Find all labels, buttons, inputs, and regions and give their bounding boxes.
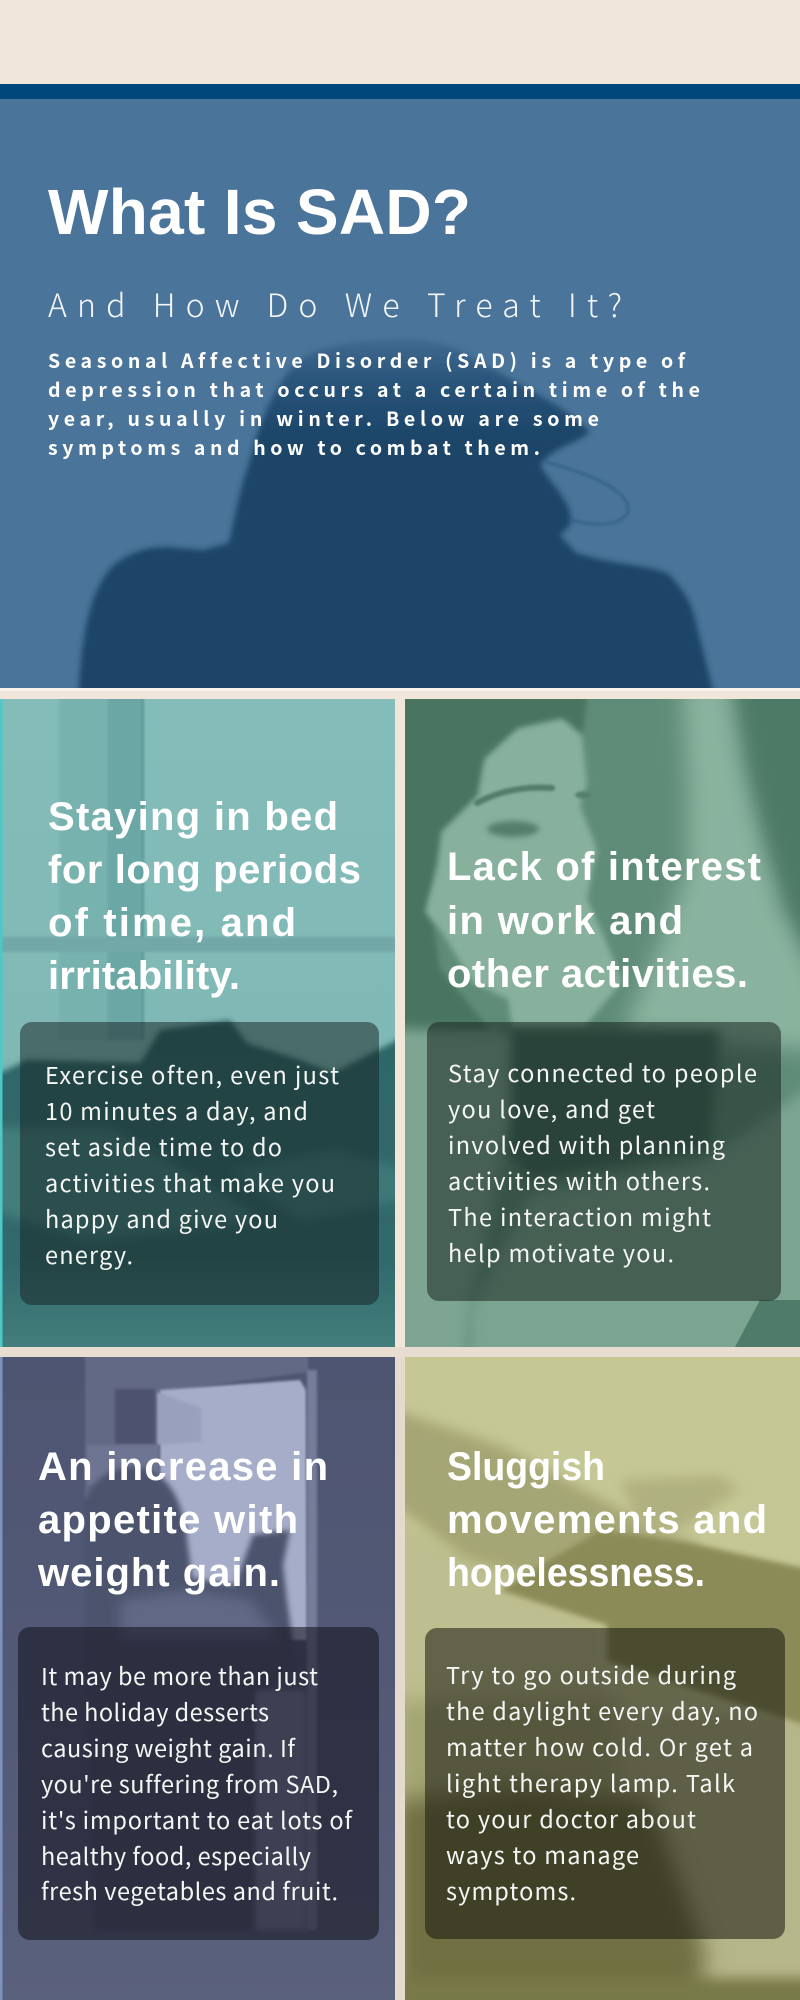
advice card: Try to go outside during — [446, 1657, 736, 1691]
heading — [447, 845, 761, 996]
advice card: you love, and get — [448, 1091, 655, 1125]
advice card: ways to manage — [446, 1837, 639, 1871]
heading — [447, 1445, 767, 1595]
heading: hopelessness. — [447, 1551, 705, 1595]
advice card: to your doctor about — [446, 1801, 696, 1835]
heading: irritability. — [48, 954, 240, 998]
panel: lack of interest — [395, 680, 800, 1360]
panel: hero introduction — [0, 99, 800, 710]
advice card: symptoms. — [446, 1873, 576, 1907]
heading: Lack of interest — [447, 845, 761, 889]
advice card: you're suffering from SAD, — [41, 1766, 338, 1800]
advice card: set aside time to do — [45, 1129, 282, 1163]
advice card: involved with planning — [448, 1127, 725, 1161]
top cream band — [0, 0, 800, 84]
heading: appetite with — [38, 1498, 298, 1542]
advice card: The interaction might — [448, 1199, 711, 1233]
heading: Staying in bed — [48, 795, 338, 839]
advice card — [427, 1022, 781, 1301]
advice card: activities that make you — [45, 1165, 335, 1199]
photo: woman resting face on hand — [395, 680, 800, 1360]
title: What Is SAD? — [48, 176, 471, 248]
advice card — [20, 1022, 379, 1305]
advice card: the daylight every day, no — [446, 1693, 758, 1727]
heading: movements and — [447, 1498, 767, 1542]
heading: of time, and — [48, 901, 296, 945]
heading: other activities. — [447, 952, 748, 996]
advice card: energy. — [45, 1237, 133, 1271]
advice card: It may be more than just — [41, 1658, 318, 1692]
advice card: causing weight gain. If — [41, 1730, 296, 1764]
heading: in work and — [447, 899, 683, 943]
advice card: Exercise often, even just — [45, 1057, 339, 1091]
heading — [37, 1445, 328, 1595]
heading: weight gain. — [37, 1551, 280, 1595]
hero photo: silhouette of woman from behind — [0, 99, 800, 710]
advice card: 10 minutes a day, and — [45, 1093, 308, 1127]
heading: An increase in — [38, 1445, 328, 1489]
heading — [48, 795, 361, 998]
advice card: it's important to eat lots of — [41, 1802, 353, 1836]
dark blue stripe — [0, 84, 800, 100]
subtitle: And How Do We Treat It? — [48, 281, 622, 327]
panel: staying in bed — [0, 690, 405, 1360]
advice card: matter how cold. Or get a — [446, 1729, 753, 1763]
advice card: light therapy lamp. Talk — [446, 1765, 735, 1799]
photo: woman lying down with hair across her face — [395, 1357, 800, 2000]
advice card — [18, 1627, 379, 1940]
advice card: activities with others. — [448, 1163, 710, 1197]
intro paragraph: year, usually in winter. Below are some — [48, 403, 599, 432]
intro paragraph: Seasonal Affective Disorder (SAD) is a type of — [48, 345, 686, 374]
advice card: the holiday desserts — [41, 1694, 269, 1728]
advice card — [425, 1628, 785, 1939]
intro paragraph — [48, 345, 700, 461]
advice card: happy and give you — [45, 1201, 278, 1235]
white divider under hero — [0, 688, 800, 691]
advice card: fresh vegetables and fruit. — [41, 1873, 338, 1907]
advice card: healthy food, especially — [41, 1838, 311, 1872]
intro paragraph: symptoms and how to combat them. — [48, 432, 540, 461]
advice card: Stay connected to people — [448, 1055, 757, 1089]
panel: increase in appetite — [0, 1350, 395, 2000]
photo: woman at an open fridge — [0, 1350, 395, 2000]
intro paragraph: depression that occurs at a certain time of the — [48, 374, 700, 403]
photo: person in bed by a window — [0, 690, 405, 1360]
advice card: help motivate you. — [448, 1235, 674, 1269]
panel: sluggish movements — [395, 1357, 800, 2000]
heading: for long periods — [48, 848, 361, 892]
heading: Sluggish — [447, 1445, 605, 1489]
